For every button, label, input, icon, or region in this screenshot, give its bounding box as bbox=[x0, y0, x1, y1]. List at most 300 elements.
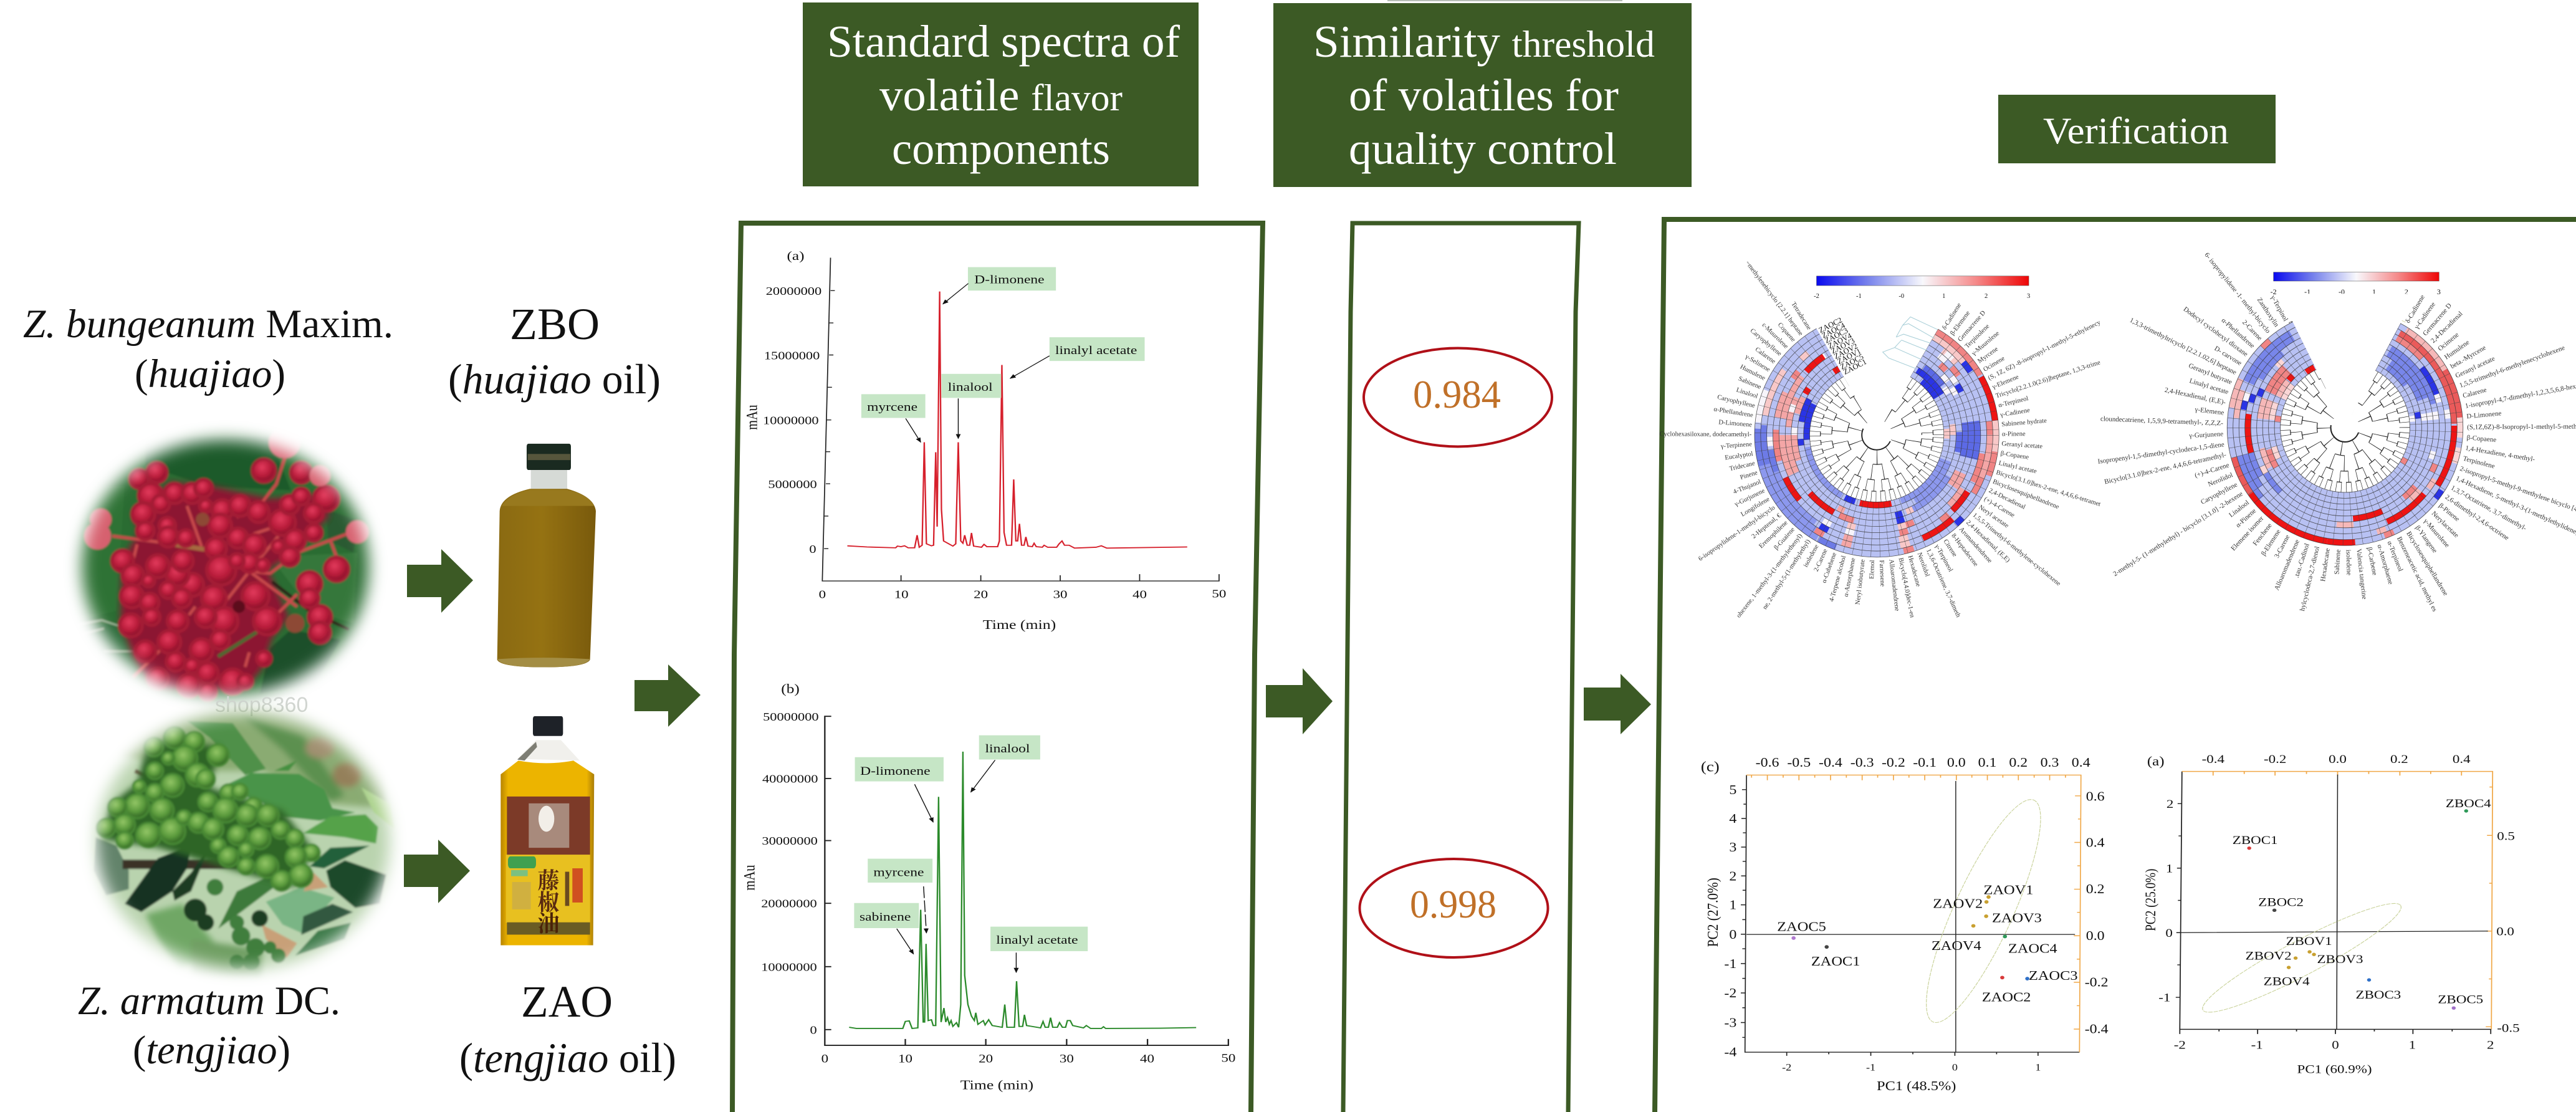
callout: similarity 0.998: 0.998 bbox=[1410, 882, 1496, 926]
chart: PCA biplot ZAO: PC2 (27.0%) bbox=[1705, 878, 1721, 947]
ZBO compound labels: Geranyl acetate bbox=[2454, 355, 2496, 380]
ZAO compound labels: Neryl isobutyrate bbox=[1854, 559, 1867, 605]
ZBO compound labels: Linalool bbox=[2228, 499, 2251, 519]
heatmap: ZBO circular clustering bbox=[2097, 251, 2576, 613]
heading: similarity threshold: quality control bbox=[1349, 123, 1617, 174]
ZAO compound labels bbox=[1659, 260, 2102, 619]
ZAO compound labels: γ-Cadinene bbox=[1999, 407, 2031, 419]
chart: spectrum (b) ZAO: sabinene bbox=[859, 910, 911, 923]
ZBO compound labels: β-Pinene bbox=[2437, 502, 2461, 523]
heading: similarity threshold bbox=[1273, 3, 1692, 187]
chart: spectrum (a) ZBO: 40 bbox=[1132, 588, 1147, 601]
ZAO compound labels: Bicyclosesquiphellandrene bbox=[1992, 478, 2060, 510]
chart: PCA biplot ZBO: 1 bbox=[2166, 861, 2173, 875]
chart: PCA biplot ZAO: 0.0 bbox=[2086, 928, 2105, 943]
chart: spectrum (b) ZAO: 20000000 bbox=[761, 898, 817, 910]
ZAO compound labels: α-Terpineol bbox=[1998, 395, 2029, 409]
ZAO compound labels: Calarene bbox=[1754, 346, 1777, 365]
ZBO compound labels: Valencia tangerine bbox=[2355, 549, 2368, 600]
chart: PCA biplot ZAO: 5 bbox=[1729, 782, 1736, 797]
ZAO compound labels: ε-Muurolene bbox=[1761, 322, 1789, 350]
ZAO compound labels: (S, 1Z, 6Z) -8-isopropyl-1-methyl-5-ethylenecy bbox=[1987, 319, 2102, 382]
chart: PCA biplot ZAO: 1 bbox=[2035, 1062, 2041, 1073]
chart: PCA biplot ZBO: 2 bbox=[2487, 1038, 2494, 1052]
chart: spectrum (a) ZBO: linalyl acetate bbox=[1055, 343, 1137, 357]
ZAO compound labels: β-Copaene bbox=[2000, 450, 2029, 461]
callout: similarity 0.984: 0.984 bbox=[1413, 372, 1501, 416]
heatmap: ZAO circular clustering bbox=[1659, 260, 2102, 619]
ZAO compound labels: Pinene bbox=[1740, 469, 1759, 481]
ZAO sample labels: ZAOV3 bbox=[1829, 336, 1856, 355]
ZAO sample labels: ZAOC2 bbox=[1982, 990, 2031, 1004]
ZBO compound labels: α-Terpineol bbox=[2386, 540, 2404, 573]
ZAO compound labels: α-Cubebene bbox=[1821, 552, 1838, 584]
ZAO compound labels: Linalyl acetate bbox=[1998, 460, 2037, 475]
heading: standard spectra bbox=[803, 2, 1199, 186]
ZBO scale and sample annotations bbox=[2271, 272, 2441, 372]
ZAO compound labels: Bicyclo[4.4.0]dec-1-en bbox=[1897, 557, 1915, 619]
ZAO sample labels bbox=[1777, 883, 2078, 1004]
ZBO compound labels: Fenchene bbox=[2251, 522, 2274, 547]
ZBO compound labels: 2-methyl-5- (1-methylethyl) - bicyclo [3.1.0] -2-hexene bbox=[2112, 490, 2244, 578]
chart: PCA biplot ZBO: -2 bbox=[2174, 1038, 2186, 1052]
heading: standard spectra: components bbox=[892, 123, 1110, 174]
panel: threshold frame bbox=[1343, 223, 1579, 1112]
ZAO sample labels: ZAOV4 bbox=[1827, 331, 1854, 350]
species label: tengjiao: (tengjiao) bbox=[133, 1028, 290, 1073]
ZAO colour scale: -2 bbox=[1814, 293, 1819, 300]
ZAO compound labels: Sabinene hydrate bbox=[2001, 418, 2047, 428]
chart: spectrum (b) ZAO: linalool bbox=[985, 742, 1030, 755]
ZAO compound labels: 1,5,5-Trimethyl-6-methylene-cyclohexene bbox=[1971, 512, 2062, 588]
ZAO compound labels: (+)-4-Carene bbox=[1983, 496, 2016, 519]
ZBO scale and sample annotations: ZBOC5 bbox=[2291, 317, 2317, 334]
chart: PCA biplot ZBO: -1 bbox=[2158, 991, 2170, 1004]
ZBO compound labels: 2,4-Hexadienal, (E,E)- bbox=[2164, 386, 2226, 406]
heading: similarity threshold: of volatiles for bbox=[1349, 70, 1619, 120]
ZBO scale and sample annotations: -0 bbox=[2339, 288, 2345, 296]
chart: PCA biplot ZAO: 0.6 bbox=[2086, 789, 2105, 803]
ZAO compound labels: Eucalyptol bbox=[1725, 451, 1753, 461]
ZAO compound labels: 2,4-Decadienal bbox=[1988, 487, 2026, 511]
ZBO sample labels: ZBOC3 bbox=[2356, 988, 2401, 1002]
ZBO compound labels: (S,1Z,6Z)-8-Isopropyl-1-methyl-5-meth bbox=[2467, 423, 2576, 431]
ZAO compound labels: γ-Terpineol bbox=[1933, 543, 1954, 573]
chart: spectrum (b) ZAO: 40 bbox=[1140, 1052, 1154, 1065]
ZAO colour scale: -0 bbox=[1898, 293, 1904, 300]
heading: standard spectra: volatile flavor bbox=[879, 70, 1123, 120]
bottle: ZAO tengjiao oil: 油 bbox=[537, 911, 559, 936]
chart: spectrum (b) ZAO: Time (min) bbox=[960, 1078, 1033, 1093]
ZAO axes bbox=[1741, 775, 2079, 1056]
ZAO compound labels: β-Guaiene bbox=[1773, 526, 1796, 551]
chart: spectrum (b) ZAO: 10 bbox=[898, 1052, 912, 1065]
chart: PCA biplot ZAO: -4 bbox=[1724, 1045, 1736, 1059]
chart: spectrum (b) ZAO: D-limonene bbox=[860, 764, 931, 777]
ZBO scale and sample annotations: -1 bbox=[2304, 288, 2310, 296]
chart: PCA biplot ZAO: 0 bbox=[1729, 927, 1736, 941]
chart: PCA biplot ZAO: -0.2 bbox=[2085, 975, 2109, 989]
chart: spectrum (b) ZAO: linalyl acetate bbox=[996, 933, 1078, 947]
arrow: spectra to threshold bbox=[1266, 668, 1333, 734]
ZAO colour scale bbox=[1814, 276, 2030, 300]
ZBO scale and sample annotations: ZBOC1 bbox=[2296, 328, 2324, 345]
ZBO compound labels: 3-Carene bbox=[2273, 534, 2291, 559]
ZAO sample tree bbox=[1883, 317, 1938, 368]
ZAO compound labels: Eremophilene bbox=[1758, 519, 1789, 550]
ZBO sample labels: ZBOC2 bbox=[2258, 895, 2304, 909]
ZAO sample labels: ZAOC5 bbox=[1839, 352, 1865, 371]
arrow: threshold to verification bbox=[1584, 674, 1651, 734]
ZAO compound labels: Myrcene bbox=[1976, 345, 1999, 365]
ZAO compound labels: Tricyclo[2.2.1.0(2.6)]heptane, 1,3,3-trime bbox=[1995, 359, 2102, 400]
ZBO compound labels: beta.-Myrcene bbox=[2449, 344, 2487, 370]
chart: spectrum (b) ZAO: 40000000 bbox=[762, 773, 818, 785]
ZAO compound labels: ne, 2-methyl-5-(1-methylethyl) bbox=[1761, 538, 1812, 611]
ZAO sample points bbox=[1791, 895, 2029, 980]
ZBO compound labels: Bicyclo[3.1.0]hex-2-ene, 4,4,6,6-tetramethyl- bbox=[2104, 451, 2227, 486]
ZAO compound labels: Neryl acetate bbox=[1977, 504, 2010, 530]
ZAO compound labels: 2,4-Hexadienal, (E,E) bbox=[1965, 519, 2011, 564]
ZAO compound labels: 2-Heptenal, € bbox=[1751, 512, 1783, 540]
chart: PCA biplot ZAO: -0.4 bbox=[1819, 755, 1842, 770]
chart: PCA biplot ZAO: -0.4 bbox=[2085, 1022, 2109, 1036]
heading: verification bbox=[1998, 95, 2276, 163]
chart: PCA biplot ZBO: 1 bbox=[2409, 1038, 2416, 1052]
ZAO sample labels: ZAOC1 bbox=[1811, 954, 1860, 969]
ZAO compound labels: α-Amorphaene bbox=[1843, 557, 1857, 597]
ZAO compound labels: Linalool bbox=[1735, 386, 1759, 400]
chart: spectrum (b) ZAO: 0 bbox=[821, 1052, 828, 1065]
ZBO compound labels: 2-isopropyl-5-methyl-9-methylene bicyclo [4 bbox=[2459, 465, 2576, 513]
ZBO scale and sample annotations: 2 bbox=[2405, 288, 2408, 296]
ZAO compound labels: Alloaromadendrene bbox=[1887, 559, 1900, 611]
ZBO sample labels bbox=[2233, 797, 2491, 1006]
chart: PCA biplot ZBO: -1 bbox=[2251, 1038, 2263, 1052]
ZBO compound labels: γ-Cadinene bbox=[2413, 300, 2437, 331]
ZAO sample labels: ZAOC4 bbox=[1821, 320, 1847, 340]
heading: similarity threshold: Similarity threshold bbox=[1313, 16, 1655, 67]
oil label: ZBO: ZBO bbox=[510, 299, 600, 349]
chart: PCA biplot ZBO: 0 bbox=[2332, 1038, 2339, 1052]
ZBO compound labels: 2-Carene bbox=[2241, 319, 2264, 342]
ZBO compound labels: α-Amorphaene bbox=[2376, 544, 2395, 585]
chart: PCA biplot ZAO: -1 bbox=[1866, 1062, 1875, 1073]
chart: spectrum (b) ZAO: 30000000 bbox=[762, 835, 818, 848]
ZAO compound labels: β-Elemene bbox=[1949, 310, 1971, 337]
ZBO compound labels: Benzeneacetic acid, methyl es bbox=[2395, 535, 2438, 613]
ZBO sample points bbox=[2247, 809, 2468, 1010]
chart: PCA biplot ZAO: PC1 (48.5%) bbox=[1877, 1078, 1956, 1093]
ZBO compound labels: α-Phellandrene bbox=[2220, 317, 2256, 350]
ZBO compound labels: γ-Terpinol bbox=[2269, 294, 2289, 323]
ZAO compound labels: Copaene bbox=[1776, 322, 1797, 343]
ZAO compound labels: 4-Terpene alcohol bbox=[1829, 555, 1847, 603]
chart: PCA biplot ZAO: 0.2 bbox=[2009, 755, 2028, 770]
ZBO compound labels: Alloaromadendrene bbox=[2273, 539, 2301, 592]
ZAO compound labels: 2-Carene bbox=[1813, 548, 1829, 573]
chart: spectrum (b) ZAO: (b) bbox=[781, 681, 800, 696]
ZBO compound labels: 1-isopropyl-4,7-dimethyl-1,2,3,5,6,8-hex bbox=[2464, 383, 2576, 410]
ZAO compound labels: Citrene bbox=[1942, 539, 1958, 558]
species label: huajiao: (huajiao) bbox=[135, 352, 285, 396]
ZBO sample labels: ZBOV3 bbox=[2317, 952, 2363, 966]
chart: spectrum (a) ZBO: mAu bbox=[743, 405, 760, 430]
arrow: oils to spectra bbox=[634, 664, 701, 727]
ZBO compound labels: Terpinolene bbox=[2462, 455, 2496, 470]
watermark text: shop8360 bbox=[215, 693, 308, 717]
ZBO dendrogram bbox=[2286, 368, 2405, 487]
heading: standard spectra: Standard spectra of bbox=[827, 16, 1180, 67]
chart: spectrum (b) ZAO: myrcene bbox=[873, 866, 924, 879]
ZAO sample labels: ZAOC3 bbox=[2029, 969, 2078, 983]
ZBO sample labels: ZBOV4 bbox=[2264, 974, 2310, 988]
chart: PCA biplot ZAO: (c) bbox=[1701, 759, 1720, 775]
ZBO sample labels: ZBOV2 bbox=[2246, 949, 2292, 962]
ZAO sample labels: ZAOC3 bbox=[1823, 326, 1849, 345]
chart: PCA biplot ZAO: -1 bbox=[1724, 956, 1736, 971]
chart: PCA biplot ZAO: -0.2 bbox=[1882, 755, 1905, 770]
chart: spectrum (a) ZBO: myrcene bbox=[867, 400, 917, 413]
chart: PCA biplot ZAO: -3 bbox=[1724, 1015, 1736, 1030]
ZBO compound labels: cloundecatriene, 1,5,9,9-tetramethyl-, Z,Z,Z- bbox=[2100, 415, 2223, 427]
ZAO compound labels: Caryophyllene bbox=[1717, 394, 1756, 410]
bottle: ZAO tengjiao oil: 藤 bbox=[537, 868, 559, 893]
oil label: tengjiao oil: (tengjiao oil) bbox=[459, 1034, 676, 1081]
ZAO compound labels: γ-Gurjunene bbox=[1733, 487, 1766, 508]
chart: PCA biplot ZBO bbox=[2142, 752, 2520, 1076]
chart: PCA biplot ZBO: 0.0 bbox=[2329, 752, 2347, 765]
chart: spectrum (a) ZBO: 50 bbox=[1212, 588, 1226, 600]
chart: spectrum (b) ZAO: 50 bbox=[1221, 1051, 1235, 1065]
ZAO sample labels: ZAOC5 bbox=[1777, 919, 1826, 934]
ZBO compound labels: Zanthoxylin bbox=[2256, 296, 2281, 328]
chart: spectrum (a) ZBO: linalool bbox=[948, 380, 993, 393]
ZAO compound labels: Hexadecane bbox=[1907, 555, 1922, 588]
ZAO compound labels: Elemol bbox=[1869, 560, 1876, 579]
ZBO sample labels: ZBOV1 bbox=[2286, 934, 2332, 947]
ZAO compound labels: γ-Muurolene bbox=[1970, 330, 2001, 358]
chart: spectrum (a) ZBO: 20000000 bbox=[766, 285, 821, 298]
ZBO compound labels: Dodecyl cyclohexyl dioxane bbox=[2182, 305, 2249, 358]
chart: PCA biplot ZAO: 0.2 bbox=[2086, 882, 2105, 896]
ZAO compound labels: Tridecane bbox=[1729, 460, 1756, 472]
ZAO compound labels: Caryophyllene bbox=[1749, 327, 1783, 358]
ZBO compound labels: Calarene bbox=[2462, 386, 2487, 400]
chart: PCA biplot ZBO: -0.5 bbox=[2497, 1021, 2520, 1035]
ZAO compound labels: 8-Heptadecene bbox=[1950, 532, 1980, 568]
chart: spectrum (a) ZBO: 0 bbox=[809, 544, 816, 556]
ZBO compound labels: hylcyclodeca-2,7-dienol bbox=[2299, 545, 2321, 612]
ZAO compound labels: D-Limonene bbox=[1718, 419, 1753, 429]
photo: red huajiao berries bbox=[69, 426, 381, 708]
chart: spectrum (b) ZAO bbox=[740, 681, 1235, 1093]
ZAO compound labels: Geranyl acetate bbox=[2001, 441, 2043, 450]
ZAO colour scale: -1 bbox=[1856, 293, 1862, 300]
panel: verification frame bbox=[1655, 219, 2576, 1112]
ZBO compound labels: γ-Elemene bbox=[2194, 406, 2224, 417]
ZBO compound labels: D- carvone bbox=[2213, 345, 2243, 367]
chart: PCA biplot ZAO: 0.4 bbox=[2072, 755, 2090, 770]
chart: spectrum (a) ZBO: 15000000 bbox=[764, 350, 820, 362]
ZBO scale and sample annotations: 3 bbox=[2437, 288, 2441, 296]
ZAO heat rings bbox=[1708, 266, 2046, 603]
chart: spectrum (a) ZBO: 10 bbox=[894, 588, 909, 601]
chart: PCA biplot ZAO: 3 bbox=[1729, 840, 1736, 855]
chart: spectrum (a) ZBO: (a) bbox=[787, 249, 805, 263]
ZBO compound labels: Geranyl butyrate bbox=[2188, 362, 2233, 386]
ZBO scale and sample annotations: ZBOC2 bbox=[2299, 333, 2326, 350]
ZAO sample labels: ZAOV1 bbox=[1984, 883, 2033, 897]
ZAO compound labels: Farnesene bbox=[1878, 560, 1886, 587]
ZAO compound labels: Tetradecane bbox=[1789, 301, 1812, 332]
ZAO dendrogram bbox=[1815, 373, 1938, 497]
ZAO compound labels: γ-Selinene bbox=[1743, 353, 1771, 373]
ZBO compound labels: 1,3,3-trimethyltricyclo [2.2.1.02,6] heptane bbox=[2128, 317, 2238, 376]
oil label: huajiao oil: (huajiao oil) bbox=[448, 355, 661, 403]
ZBO scale and sample annotations: ZBOV3 bbox=[2305, 344, 2332, 361]
chart: PCA biplot ZAO: 4 bbox=[1729, 812, 1736, 826]
ZAO compound labels: ~methylenebicyclo [2.2.1] heptane bbox=[1744, 260, 1804, 337]
ZBO compound labels: 2,6-dimethyl-2,4,6-octriene bbox=[2444, 493, 2511, 542]
ZBO compound labels: β-Copaene bbox=[2466, 434, 2497, 444]
ZBO compound labels: isoledene bbox=[2344, 550, 2353, 575]
chart: spectrum (b) ZAO: 20 bbox=[979, 1052, 993, 1065]
species label: Z. bungeanum Maxim.: Z. bungeanum Maxim. bbox=[23, 302, 393, 347]
ZAO compound labels: Ocimene bbox=[1982, 355, 2006, 373]
chart: PCA biplot ZAO bbox=[1701, 755, 2109, 1093]
ZBO compound labels: γ-Gurjunene bbox=[2188, 430, 2223, 439]
ZAO compound labels: isoledene bbox=[1803, 544, 1821, 568]
ZAO compound labels: Nerolidol bbox=[1916, 552, 1931, 578]
bottle: ZBO huajiao oil bbox=[497, 444, 596, 668]
ZAO colour scale: 3 bbox=[2027, 293, 2030, 300]
chart: PCA biplot ZBO: 0.5 bbox=[2497, 830, 2515, 843]
ZAO sample labels: ZAOV3 bbox=[1992, 911, 2042, 925]
ZBO compound labels: Humulene bbox=[2443, 338, 2471, 361]
ZBO sample labels: ZBOC5 bbox=[2438, 992, 2483, 1006]
chart: spectrum (a) ZBO bbox=[743, 249, 1226, 633]
ZBO compound labels: β-Elemene bbox=[2260, 528, 2282, 557]
ZAO colour scale: 1 bbox=[1942, 293, 1945, 300]
ZBO compound labels: β-Carbene bbox=[2365, 547, 2378, 576]
photo: green tengjiao berries bbox=[87, 703, 399, 980]
ZAO compound labels: Sabinene bbox=[1737, 375, 1762, 391]
ZBO compound labels: δ-Cadinene bbox=[2404, 294, 2426, 325]
ZAO sample labels: ZAOC2 bbox=[1817, 315, 1844, 335]
ZBO scale and sample annotations: ZBOC4 bbox=[2287, 312, 2315, 329]
chart: PCA biplot ZBO: PC2 (25.0%) bbox=[2142, 869, 2158, 931]
ZBO compound labels: Isopropenyl-1,5-dimethyl-cyclodeca-1,5-diene bbox=[2097, 441, 2225, 466]
ZBO compound labels bbox=[2097, 251, 2576, 613]
chart: PCA biplot ZBO: 0 bbox=[2165, 926, 2173, 939]
callout: similarity 0.998 bbox=[1360, 859, 1548, 957]
chart: spectrum (b) ZAO: mAu bbox=[740, 865, 758, 891]
ZBO compound labels: Germacrene D bbox=[2421, 302, 2453, 337]
chart: PCA biplot ZBO: (a) bbox=[2147, 754, 2165, 769]
ZBO scale and sample annotations: 1 bbox=[2372, 288, 2376, 296]
chart: PCA biplot ZBO: PC1 (60.9%) bbox=[2297, 1062, 2372, 1076]
ZAO compound labels: ohexene, 1-methyl-3-(1-methylethenyl) bbox=[1735, 532, 1804, 619]
ZAO compound labels: Terpinolene bbox=[1964, 323, 1991, 350]
ZAO compound labels: α-Pinene bbox=[2002, 431, 2026, 438]
species label: Z. armatum DC.: Z. armatum DC. bbox=[78, 979, 340, 1023]
ZAO compound labels: γ-Elemene bbox=[1991, 373, 2020, 391]
ZBO heat rings bbox=[2097, 251, 2576, 613]
ZBO compound labels: 1,5,5-trimethyl-6-methylenecyclohexene bbox=[2458, 344, 2566, 390]
ZBO compound labels: Linalyl acetate bbox=[2188, 377, 2229, 396]
chart: spectrum (a) ZBO: 20 bbox=[974, 588, 988, 601]
ZAO sample labels: ZAOV1 bbox=[1836, 347, 1862, 366]
ZAO compound labels: 6-isopropylidene-1-methyl-bicyclo bbox=[1697, 504, 1776, 563]
ZAO compound labels: Germacrene D bbox=[1956, 309, 1987, 343]
ZBO axes bbox=[2176, 772, 2491, 1034]
chart: PCA biplot ZBO: -0.4 bbox=[2202, 752, 2224, 765]
ZAO compound labels: Cyclohexasiloxane, dodecamethyl- bbox=[1659, 431, 1752, 438]
chart: spectrum (a) ZBO: 10000000 bbox=[763, 415, 819, 427]
chart: spectrum (b) ZAO: 10000000 bbox=[761, 961, 817, 974]
chart: PCA biplot ZAO: 1 bbox=[1729, 898, 1736, 912]
ZBO compound labels: Bicyclosesquiphellandrene bbox=[2405, 530, 2449, 597]
ZBO compound labels: Sabinene bbox=[2333, 549, 2342, 575]
ZBO compound labels: Caryophyllene bbox=[2200, 481, 2239, 506]
ZBO compound labels: D-Limonene bbox=[2466, 410, 2502, 420]
ZAO sample labels: ZAOV2 bbox=[1832, 342, 1859, 361]
ZBO compound labels: 6- isopropylidene -1- methyl-bicyclo bbox=[2203, 251, 2272, 335]
ZAO compound labels: 1,3,6-Octatriene, 3,7-dimeth bbox=[1925, 548, 1961, 619]
ZAO compound labels: Bicyclo[3.1.0]hex-2-ene, 4,4,6,6-tetramet bbox=[1995, 469, 2102, 508]
ZAO sample labels: ZAOV4 bbox=[1932, 939, 1981, 953]
chart: PCA biplot ZAO: 0.0 bbox=[1947, 755, 1966, 770]
chart: PCA biplot ZAO: -2 bbox=[1724, 985, 1736, 1000]
ZAO compound labels: α-Phellandrene bbox=[1713, 406, 1754, 419]
ZBO scale and sample annotations: ZBOC3 bbox=[2293, 323, 2320, 340]
ZBO compound labels: (+)-4-Carene bbox=[2194, 461, 2230, 479]
ZBO scale and sample annotations: ZBOV4 bbox=[2302, 338, 2330, 356]
chart: PCA biplot ZAO: 0 bbox=[1952, 1062, 1958, 1073]
ZBO scale and sample annotations: ZBOV2 bbox=[2308, 349, 2335, 367]
ZBO sample labels: ZBOC4 bbox=[2446, 797, 2491, 810]
ZBO compound labels: Hexadecane bbox=[2319, 548, 2332, 582]
ZBO compound labels: γ-Muurolene bbox=[2421, 517, 2451, 549]
heading: verification: Verification bbox=[2043, 110, 2229, 151]
ZAO compound labels: δ-Cadinene bbox=[1941, 302, 1963, 331]
ZBO compound labels: 1,4-Hexadiene, 4-methyl- bbox=[2465, 444, 2535, 463]
ZAO compound labels: Longifolene bbox=[1740, 496, 1771, 518]
bottle: ZAO tengjiao oil bbox=[500, 716, 594, 945]
chart: PCA biplot ZBO: 0.4 bbox=[2453, 752, 2471, 765]
chart: PCA biplot ZAO: 0.1 bbox=[1978, 755, 1997, 770]
chart: spectrum (a) ZBO: D-limonene bbox=[974, 273, 1045, 286]
ZBO compound labels: 2,4-Decadienal bbox=[2430, 310, 2464, 345]
panel: spectra frame bbox=[732, 223, 1263, 1112]
ZBO compound labels: 1,3,7-Octatriene, 3,7-dimethyl- bbox=[2449, 484, 2528, 532]
chart: PCA biplot ZAO: 2 bbox=[1729, 869, 1736, 883]
chart: PCA biplot ZBO: 0.0 bbox=[2496, 924, 2514, 938]
ZAO sample labels bbox=[1817, 315, 1868, 376]
ZBO compound labels: Ocimene bbox=[2436, 331, 2461, 353]
callout: similarity 0.984 bbox=[1364, 348, 1552, 446]
ZBO scale and sample annotations: -2 bbox=[2271, 288, 2277, 296]
chart: PCA biplot ZBO: 0.2 bbox=[2390, 752, 2408, 765]
ZAO compound labels: γ-Terpinene bbox=[1720, 441, 1753, 450]
chart: spectrum (a) ZBO: 5000000 bbox=[768, 479, 817, 491]
ZAO sample labels: ZAOC1 bbox=[1842, 357, 1868, 376]
ZBO compound labels: Elemene isomer bbox=[2229, 515, 2265, 552]
chart: PCA biplot ZAO: -2 bbox=[1782, 1062, 1791, 1073]
arrow: huajiao to ZBO bbox=[407, 549, 473, 613]
chart: spectrum (a) ZBO: 0 bbox=[819, 588, 826, 601]
